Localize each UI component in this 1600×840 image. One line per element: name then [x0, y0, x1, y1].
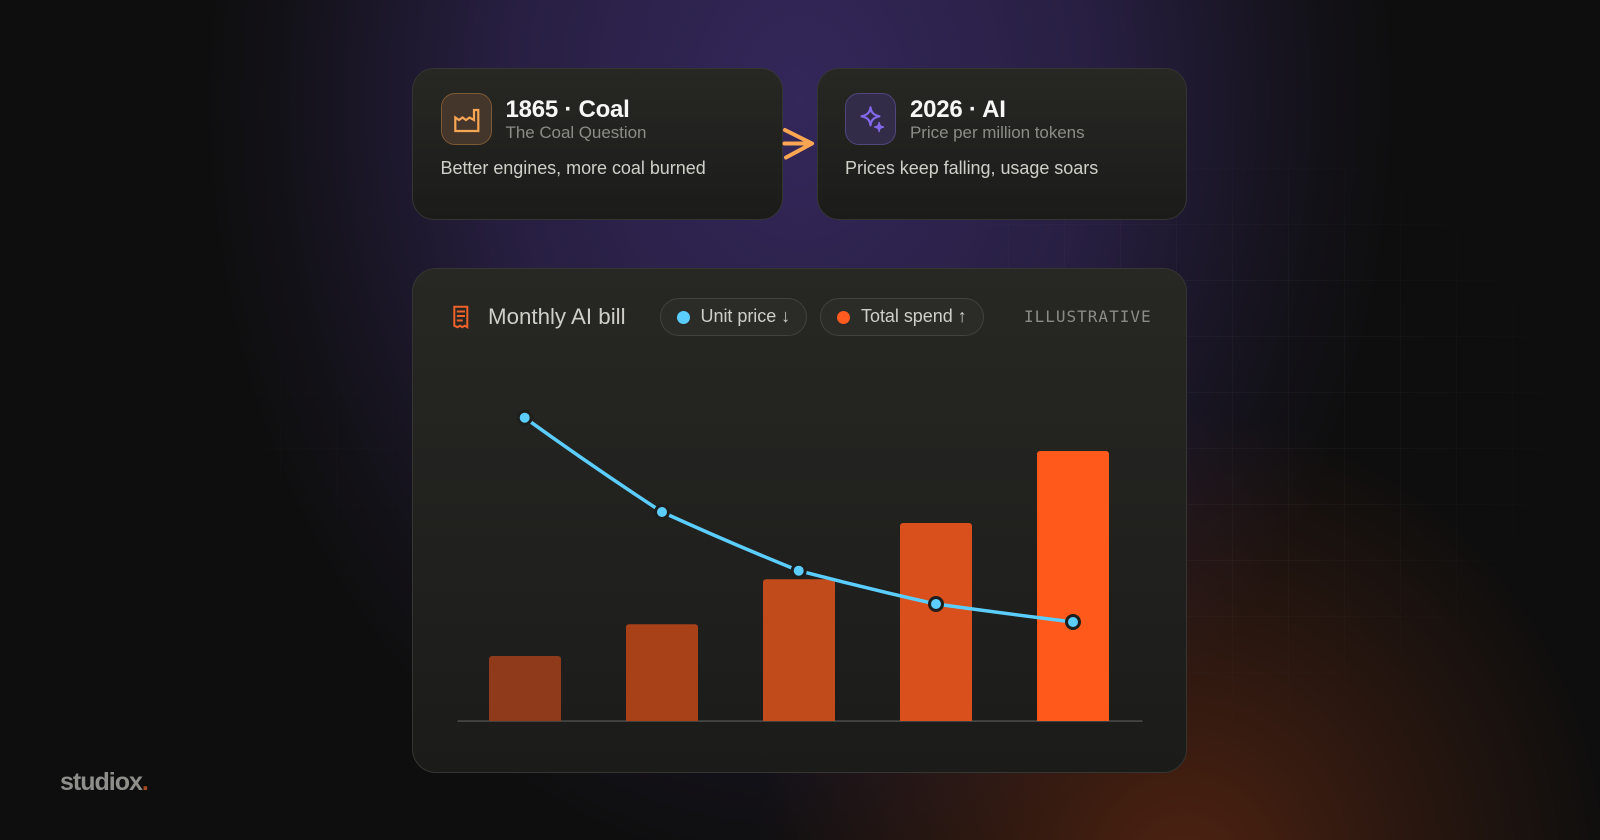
panel: 1865 coal card: [412, 68, 783, 220]
legend: total spend: [820, 298, 984, 336]
heading: 2026 AI: 2026 · AI: [910, 96, 1006, 123]
icon: receipt: [453, 306, 468, 329]
icon: factory: [441, 93, 492, 145]
legend: total spend: Total spend ↑: [861, 306, 967, 326]
line: unit price: [525, 418, 1073, 622]
axis: [458, 720, 1142, 722]
panel: monthly AI bill chart: [412, 268, 1187, 773]
icon: sparkles: [845, 93, 896, 145]
text: prices keep falling: Prices keep falling, usage soars: [845, 158, 1098, 178]
heading: 1865 Coal: 1865 · Coal: [506, 96, 630, 123]
label: illustrative: ILLUSTRATIVE: [1024, 306, 1152, 326]
panel: 2026 AI card: [817, 68, 1187, 220]
subtitle: the coal question: The Coal Question: [506, 122, 646, 142]
logo: studiox: studiox.: [60, 768, 148, 796]
heading: monthly AI bill: Monthly AI bill: [488, 304, 626, 329]
bars: total spend: [489, 451, 1109, 721]
text: better engines: Better engines, more coal burned: [440, 158, 706, 178]
subtitle: price per million tokens: Price per million tokens: [910, 122, 1085, 142]
arrow: coal to AI: [782, 128, 814, 160]
points: unit price: [518, 411, 1080, 628]
legend: unit price: [660, 298, 807, 336]
legend: unit price: Unit price ↓: [700, 306, 790, 326]
